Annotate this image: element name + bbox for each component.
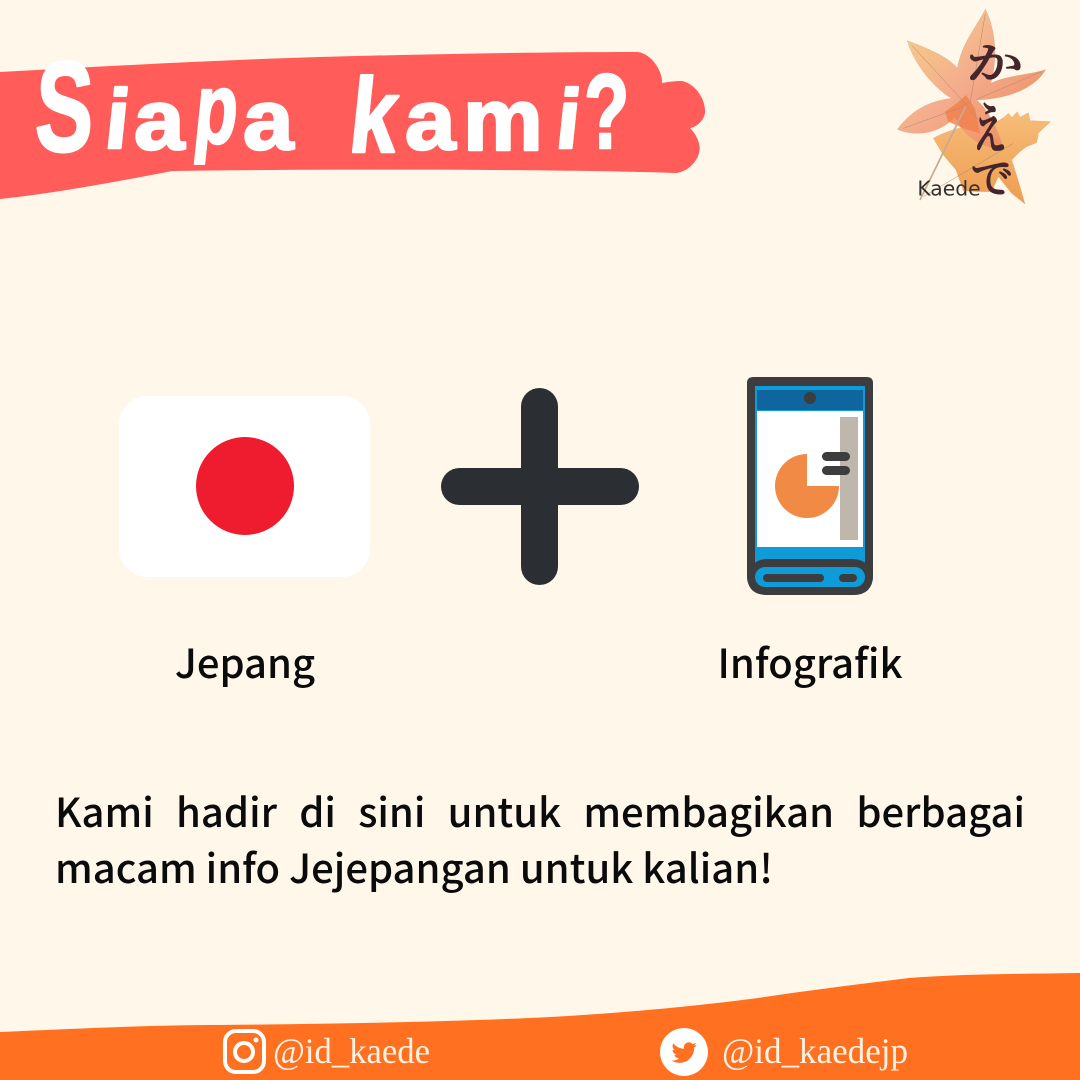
instagram handle: @id_kaede	[273, 1031, 430, 1071]
icon: Japanese flag	[119, 396, 370, 577]
title text: k	[345, 57, 404, 175]
title text: a	[405, 73, 457, 167]
icon: leaf centre blotch	[945, 95, 980, 133]
logo kana: え	[973, 86, 1007, 165]
icon: plus sign	[441, 388, 639, 585]
icon: smartphone with infographic	[747, 377, 873, 595]
title text: a	[134, 73, 186, 167]
logo kana: で	[971, 145, 1013, 206]
title text: i	[552, 72, 585, 166]
label: Infografik: Infografik	[718, 632, 902, 690]
title text: i	[101, 72, 134, 166]
title text: S	[33, 36, 96, 179]
logo kana	[966, 31, 1024, 206]
title text: a	[243, 73, 295, 167]
icon: orange lower maple leaf	[933, 112, 1051, 204]
body text: Kami hadir di sini untuk membagikan berbagai macam info Jejepangan untuk kalian!	[55, 781, 1025, 895]
twitter handle: @id_kaedejp	[722, 1031, 908, 1071]
logo: Kaede maple leaves	[897, 9, 1051, 206]
label: Jepang: Jepang	[175, 632, 315, 690]
icon: instagram	[225, 1031, 264, 1072]
title text	[33, 36, 629, 179]
title text: m	[463, 71, 543, 169]
footer wave	[0, 973, 1080, 1080]
icon: pink upper maple leaf	[897, 9, 1046, 150]
title text: p	[190, 54, 244, 165]
logo wordmark: Kaede	[917, 176, 981, 200]
icon: twitter	[660, 1028, 708, 1076]
title text: ?	[584, 53, 629, 171]
logo kana: か	[966, 31, 1024, 91]
icon: leaf stem and veins	[903, 13, 1042, 197]
title banner	[0, 36, 705, 199]
